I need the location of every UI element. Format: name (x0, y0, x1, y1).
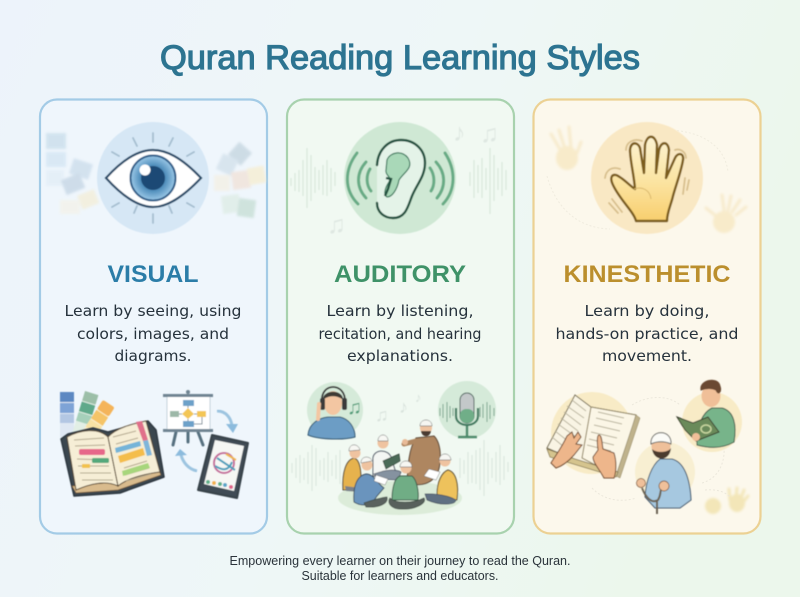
illustration: tablet (198, 435, 248, 498)
icon: ear (344, 122, 456, 234)
figure: teacher (402, 420, 440, 485)
title: Quran Reading Learning Styles (160, 39, 640, 77)
heading: visual: VISUAL (108, 261, 198, 288)
panel: visual (40, 100, 267, 534)
illustration: headphone listener: ♫ (347, 397, 362, 419)
illustration: open book (61, 421, 164, 496)
text: auditory description: Learn by listening, (326, 302, 474, 320)
colour swatches right (214, 142, 266, 218)
figure: student yellow right (424, 454, 458, 504)
panel: auditory (287, 100, 514, 534)
text: auditory description (318, 302, 482, 365)
icon: eye (97, 122, 209, 234)
sound waves lower (292, 440, 508, 496)
music notes top: ♫ (327, 211, 346, 239)
music notes lower: ♪ (415, 390, 422, 405)
colour swatches left (46, 133, 99, 214)
music notes lower (375, 390, 422, 425)
text: visual description (64, 302, 242, 365)
text: visual description: diagrams. (114, 347, 192, 365)
music notes top: ♪ (453, 119, 466, 147)
text: kinesthetic description: hands-on practice, and (556, 325, 738, 343)
music notes top (327, 119, 499, 239)
faint hand prints lower (705, 488, 748, 514)
illustration: headphone listener (307, 382, 363, 439)
text: kinesthetic description: Learn by doing, (584, 302, 710, 320)
illustration: flowchart easel (163, 390, 213, 445)
figure: student white (373, 435, 401, 480)
illustration: hands on book (547, 392, 640, 478)
illustration: microphone (438, 381, 496, 439)
panel: kinesthetic (534, 100, 760, 534)
figure: student green (389, 461, 425, 509)
arrow: flow to chart (175, 449, 197, 471)
arrow: flow to tablet (217, 411, 238, 433)
illustration: reader in green (677, 380, 742, 452)
icon: hand (591, 122, 703, 234)
music notes lower: ♫ (375, 405, 388, 425)
music notes top: ♫ (480, 120, 499, 148)
text: visual description: colors, images, and (77, 325, 229, 343)
text: auditory description: recitation, and hearing (318, 325, 482, 343)
faint handprint top right (706, 195, 746, 233)
footer text: Empowering every learner on their journey to read the Quran. (230, 554, 570, 568)
footer text: Suitable for learners and educators. (302, 569, 498, 583)
heading: auditory: AUDITORY (334, 261, 466, 288)
heading: kinesthetic: KINESTHETIC (564, 261, 730, 288)
dotted motion trails (547, 130, 728, 229)
text: visual description: Learn by seeing, using (64, 302, 242, 320)
figure: student blue (354, 457, 388, 507)
text: kinesthetic description (556, 302, 738, 365)
footer text (230, 554, 570, 583)
faint handprint top left (551, 127, 581, 170)
music notes lower: ♪ (399, 397, 408, 417)
illustration: study circle (338, 420, 462, 515)
figure: student yellow left (343, 445, 361, 492)
dashed circles connecting figures (592, 397, 730, 500)
sound waves top (291, 148, 506, 214)
illustration: man with prayer beads (635, 433, 695, 514)
illustration: colour fans (60, 391, 115, 444)
text: kinesthetic description: movement. (602, 347, 692, 365)
text: auditory description: explanations. (347, 347, 453, 365)
